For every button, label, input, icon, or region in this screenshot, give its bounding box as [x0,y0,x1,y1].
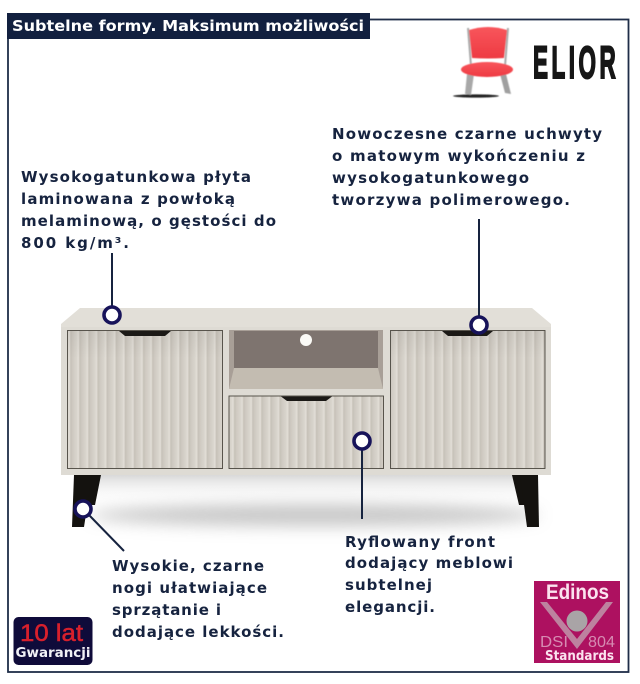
text block: legs [112,557,284,641]
callout line and marker: front [354,433,370,519]
wordmark: ELIOR [533,38,619,88]
text block: legs: dodające lekkości. [112,623,284,641]
badge: Edinos standards: Edinos [546,581,609,604]
text block: legs: nogi ułatwiające [112,579,267,597]
brand logo: Elior [453,27,619,98]
floor shadow [90,475,540,526]
badge: Edinos standards [534,581,620,664]
text block: board [21,168,276,252]
right legs [512,475,539,527]
text block: handles: o matowym wykończeniu z [332,147,585,165]
cabinet top [61,308,551,330]
cable hole [300,334,312,346]
text block: board: Wysokogatunkowa płyta [21,168,251,186]
text block: fluted front: subtelnej [345,576,432,594]
text block: handles: tworzywa polimerowego. [332,191,570,209]
left legs [72,475,101,527]
badge: 10-year warranty [14,617,92,665]
text block: board: melaminową, o gęstości do [21,212,276,230]
text block: legs: sprzątanie i [112,601,221,619]
text block: fluted front: Ryflowany front [345,533,495,551]
text block: board: laminowana z powłoką [21,190,235,208]
badge: Edinos standards: DSI [540,634,568,651]
text block: handles: wysokogatunkowego [332,169,529,187]
drawer [229,396,384,468]
text block: legs: Wysokie, czarne [112,557,264,575]
badge: Edinos standards: Standards [545,648,614,664]
callout line and marker: legs [75,501,124,551]
text block: handles: Nowoczesne czarne uchwyty [332,125,602,143]
callout line and marker: board [104,253,120,323]
left door [68,330,222,468]
badge: 10-year warranty: 10 lat [20,620,83,647]
callout line and marker: handle [471,219,487,333]
open shelf [229,330,383,389]
heading: Subtelne formy. Maksimum możliwości [12,17,364,35]
icon: red chair [453,27,513,98]
text block: fluted front: elegancji. [345,598,435,616]
text block: handles [332,125,602,209]
furniture: TV cabinet [61,308,551,527]
text block: board: 800 kg/m³. [21,234,129,252]
badge: Edinos standards: 804 [588,634,615,651]
heading [7,13,370,39]
text block: fluted front: dodający meblowi [345,554,513,572]
badge: 10-year warranty: Gwarancji [16,646,91,661]
right door [390,330,545,468]
cabinet body [61,327,551,475]
text block: fluted front [345,533,513,616]
